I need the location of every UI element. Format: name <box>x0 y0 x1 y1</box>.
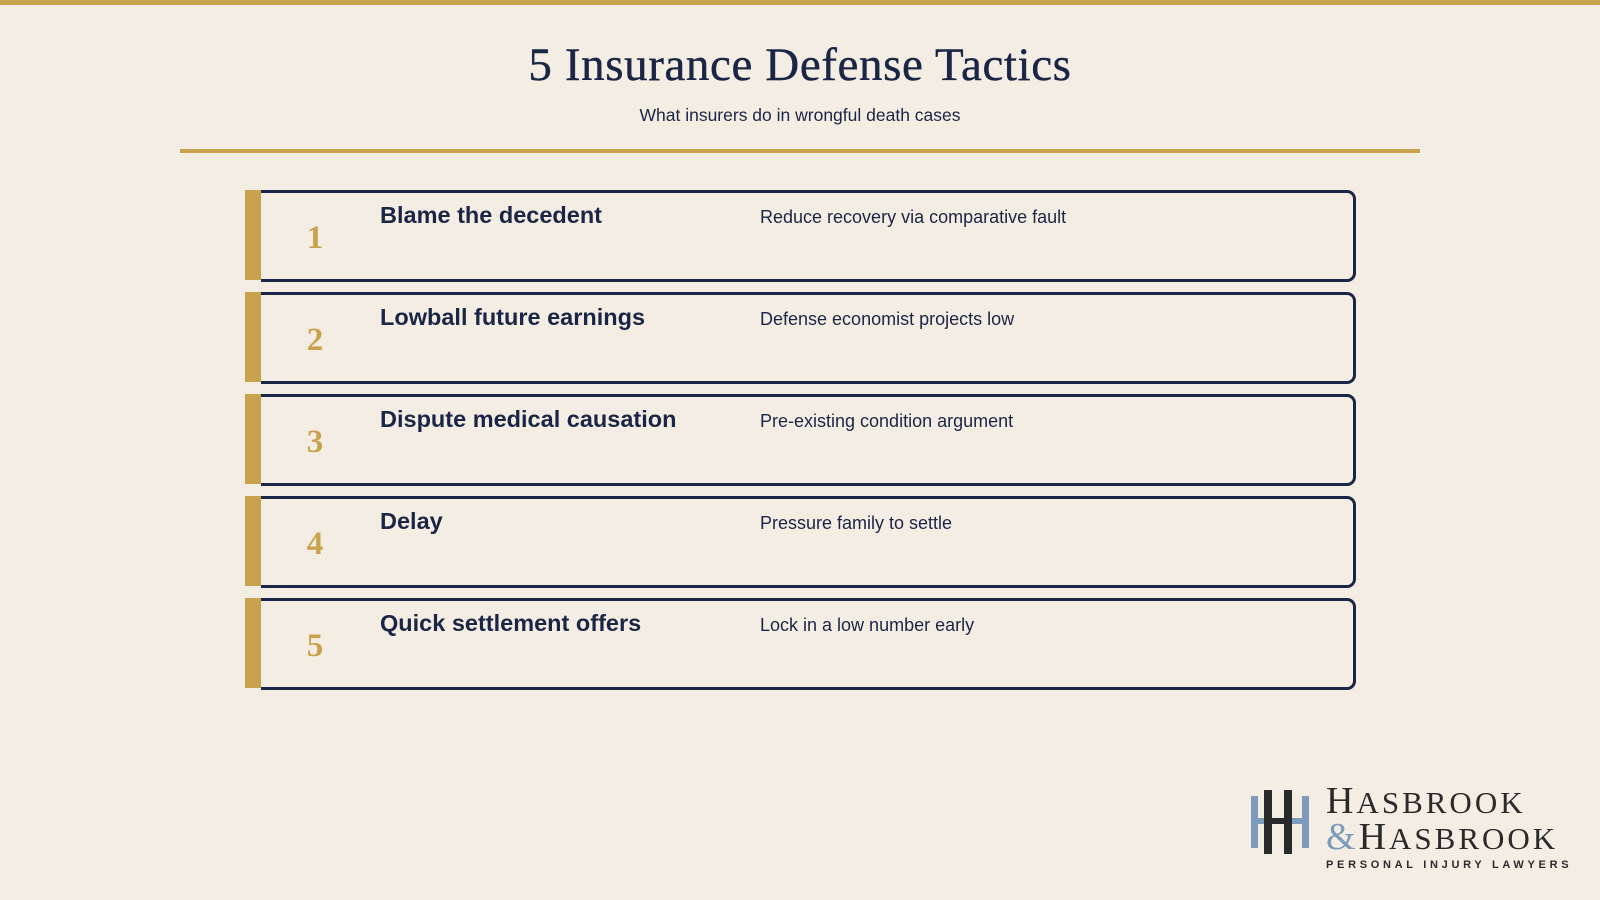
logo <box>1251 780 1572 871</box>
top accent bar <box>0 0 1600 5</box>
icon: HH monogram <box>1251 790 1309 854</box>
row 2: Lowball future earnings <box>380 304 645 330</box>
row 5: 5 <box>307 628 323 664</box>
row 1: 1 <box>307 220 323 256</box>
row 3 <box>245 394 1356 486</box>
row 2 <box>245 292 1356 384</box>
row 4: Delay <box>380 508 443 534</box>
row 2: 2 <box>307 322 323 358</box>
row 4: Pressure family to settle <box>760 513 952 533</box>
row 4: 4 <box>307 526 323 562</box>
title: 5 Insurance Defense Tactics <box>528 39 1072 91</box>
logo: PERSONAL INJURY LAWYERS <box>1326 859 1572 871</box>
row 5 <box>245 598 1356 690</box>
row 1: Blame the decedent <box>380 202 602 228</box>
row 3: 3 <box>307 424 323 460</box>
logo text <box>1326 780 1558 858</box>
row 5: Lock in a low number early <box>760 615 974 635</box>
row 4 <box>245 496 1356 588</box>
row 1 <box>245 190 1356 282</box>
row 5: Quick settlement offers <box>380 610 641 636</box>
row 1: Reduce recovery via comparative fault <box>760 207 1066 227</box>
row 2: Defense economist projects low <box>760 309 1014 329</box>
subtitle: What insurers do in wrongful death cases <box>640 105 960 125</box>
logo text: HASBROOK <box>1326 780 1526 822</box>
logo text: &HASBROOK <box>1326 816 1558 858</box>
row 3: Pre-existing condition argument <box>760 411 1013 431</box>
row 3: Dispute medical causation <box>380 406 676 432</box>
